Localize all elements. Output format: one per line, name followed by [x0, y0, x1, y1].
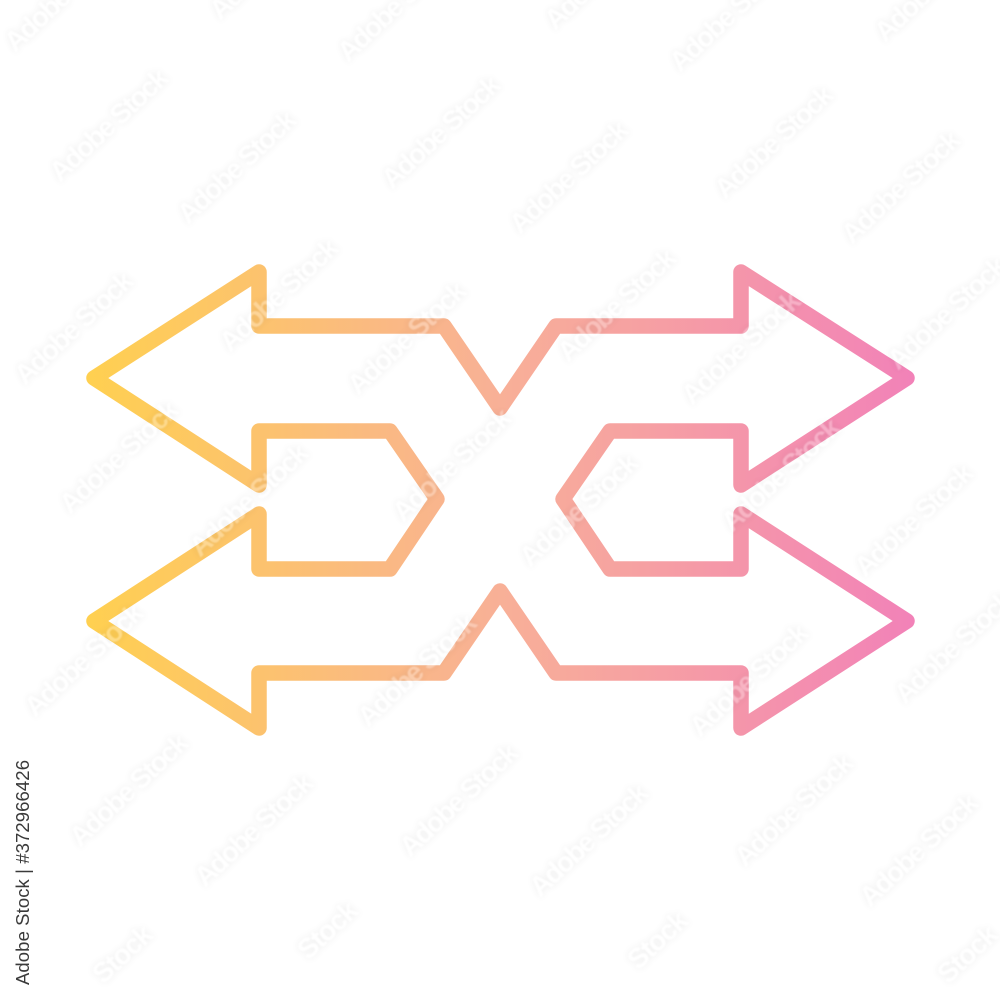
watermark pattern: Adobe Stock: [551, 241, 683, 367]
watermark pattern: Adobe Stock: [183, 436, 315, 562]
watermark pattern: Adobe Stock: [8, 264, 140, 390]
watermark pattern: Adobe Stock: [683, 616, 815, 742]
watermark pattern: Adobe Stock: [393, 736, 525, 862]
watermark pattern: Adobe Stock: [728, 746, 860, 872]
watermark pattern: Stock: [291, 894, 364, 965]
watermark pattern: Adobe Stock: [503, 113, 635, 239]
watermark pattern: Adobe Stock: [715, 411, 847, 537]
watermark pattern: Adobe Stock: [171, 103, 303, 229]
watermark pattern: Stock: [86, 918, 159, 989]
watermark pattern: Adobe Stock: [853, 786, 985, 912]
watermark pattern: Adobe Stock: [675, 284, 807, 410]
watermark pattern: Adobe Stock: [513, 446, 645, 572]
watermark pattern: Adobe Stock: [835, 123, 967, 249]
watermark pattern: Adobe Stock: [523, 776, 655, 902]
watermark pattern: Adobe Stock: [375, 68, 507, 194]
watermark pattern: Adobe Stock: [53, 393, 185, 519]
stock id text: Adobe Stock | #372966426: [12, 760, 33, 985]
watermark pattern: Adobe Stock: [341, 274, 473, 400]
watermark pattern: Adobe Stock: [43, 61, 175, 187]
watermark pattern: Adobe Stock: [351, 606, 483, 732]
watermark pattern: Adobe Stock: [708, 78, 840, 204]
icon: crossing arrows: [94, 272, 907, 728]
watermark pattern: Adobe Stock: [63, 726, 195, 852]
arrow: four-headed crossing outline: [94, 272, 907, 728]
watermark pattern: Adobe Stock: [213, 231, 345, 357]
watermark pattern: Adobe Stock: [188, 766, 320, 892]
watermark pattern: Adobe Stock: [18, 596, 150, 722]
watermark pattern: Stock: [621, 904, 694, 975]
watermark pattern: Adobe Stock: [848, 456, 980, 582]
watermark pattern: Adobe Stock: [386, 401, 518, 527]
